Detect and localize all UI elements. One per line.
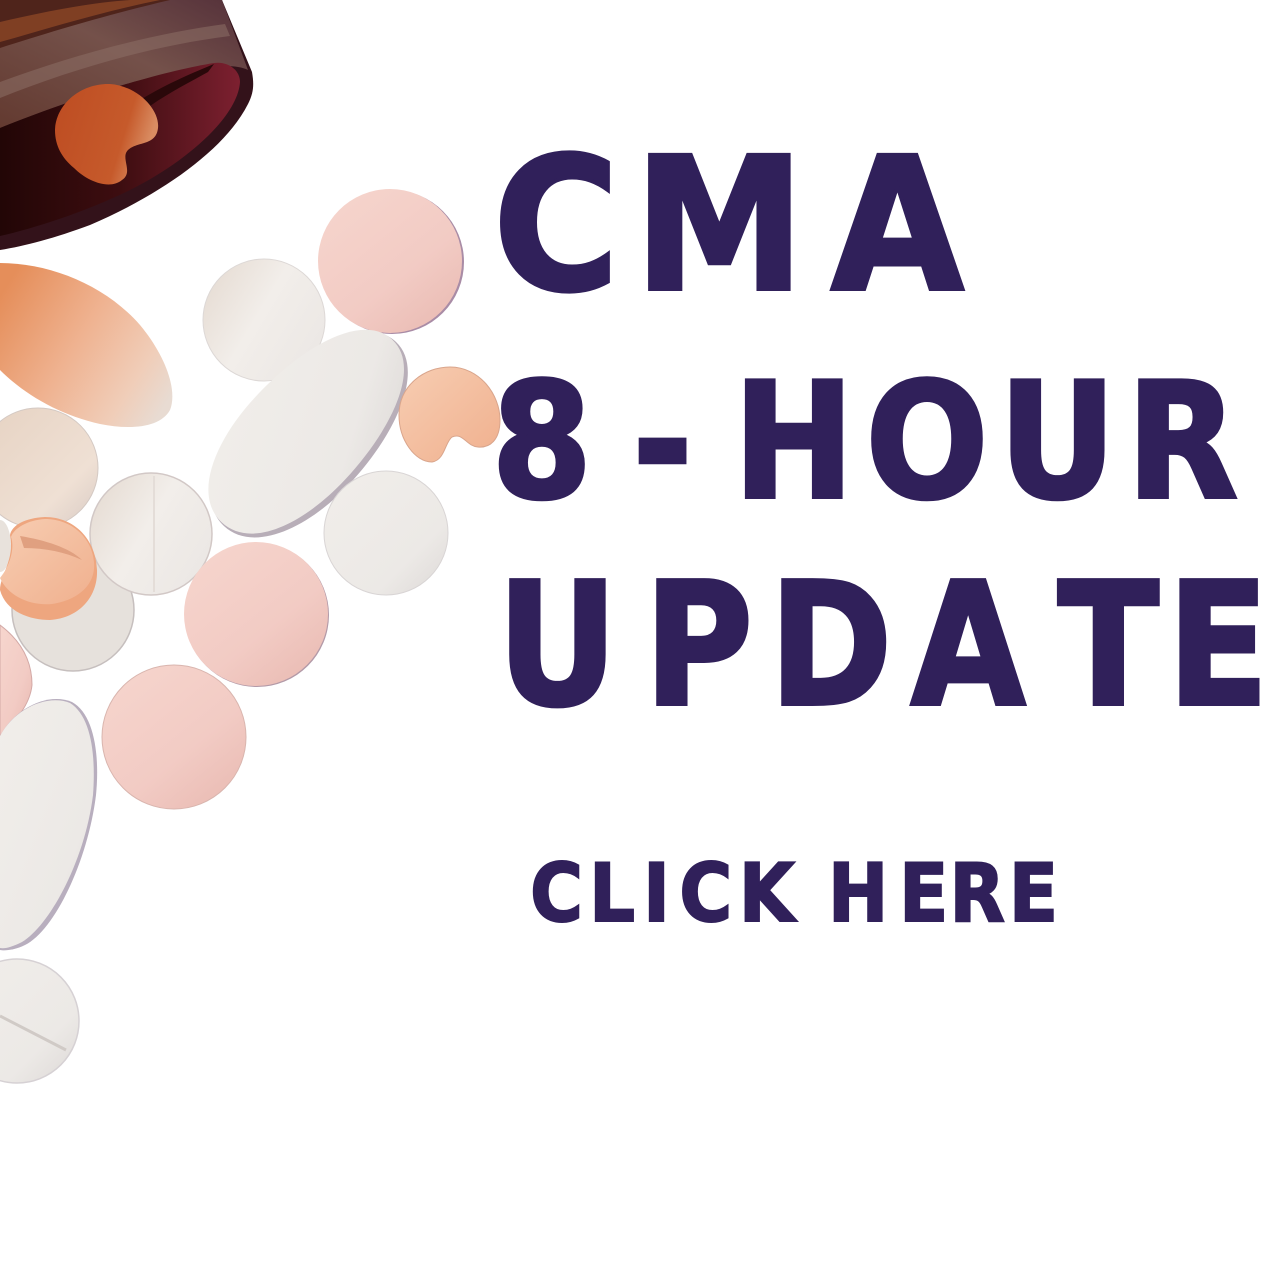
pill: pink partial left bbox=[0, 625, 32, 736]
pill: pink round lower bbox=[102, 665, 246, 809]
pill: peach scored round bbox=[0, 517, 97, 620]
pill: white round top bbox=[203, 259, 325, 381]
pill: white round right bbox=[324, 471, 448, 595]
pill: large orange oval bbox=[0, 263, 172, 427]
pill: white scored bottom bbox=[0, 959, 79, 1083]
bottle opening interior bbox=[0, 63, 240, 236]
call to action: CLICK HERE: CLICK HERE bbox=[530, 846, 1058, 940]
pill: large white oval centre bbox=[178, 299, 442, 569]
illustration: scattered pills bbox=[0, 189, 500, 1083]
pill: pink round top bbox=[320, 190, 464, 334]
icon: heart-shaped pill inside bottle bbox=[55, 84, 158, 184]
pill: pink round centre bbox=[185, 543, 329, 687]
pill: white sliver at left edge bbox=[0, 520, 11, 572]
heading line: 8 - HOUR: 8 - HOUR bbox=[492, 349, 1238, 535]
pill: white scored round bbox=[90, 473, 212, 595]
bottle neck and rim bbox=[0, 0, 253, 250]
pill: peach heart right bbox=[399, 367, 500, 462]
pill: white round under peach bbox=[12, 549, 134, 671]
illustration: pill bottle bbox=[0, 0, 253, 250]
pill: beige round left bbox=[0, 408, 98, 528]
pill: white oval lower bbox=[0, 699, 97, 950]
heading line: CMA: CMA bbox=[493, 118, 964, 332]
heading line: UPDATE: UPDATE bbox=[497, 546, 1269, 745]
